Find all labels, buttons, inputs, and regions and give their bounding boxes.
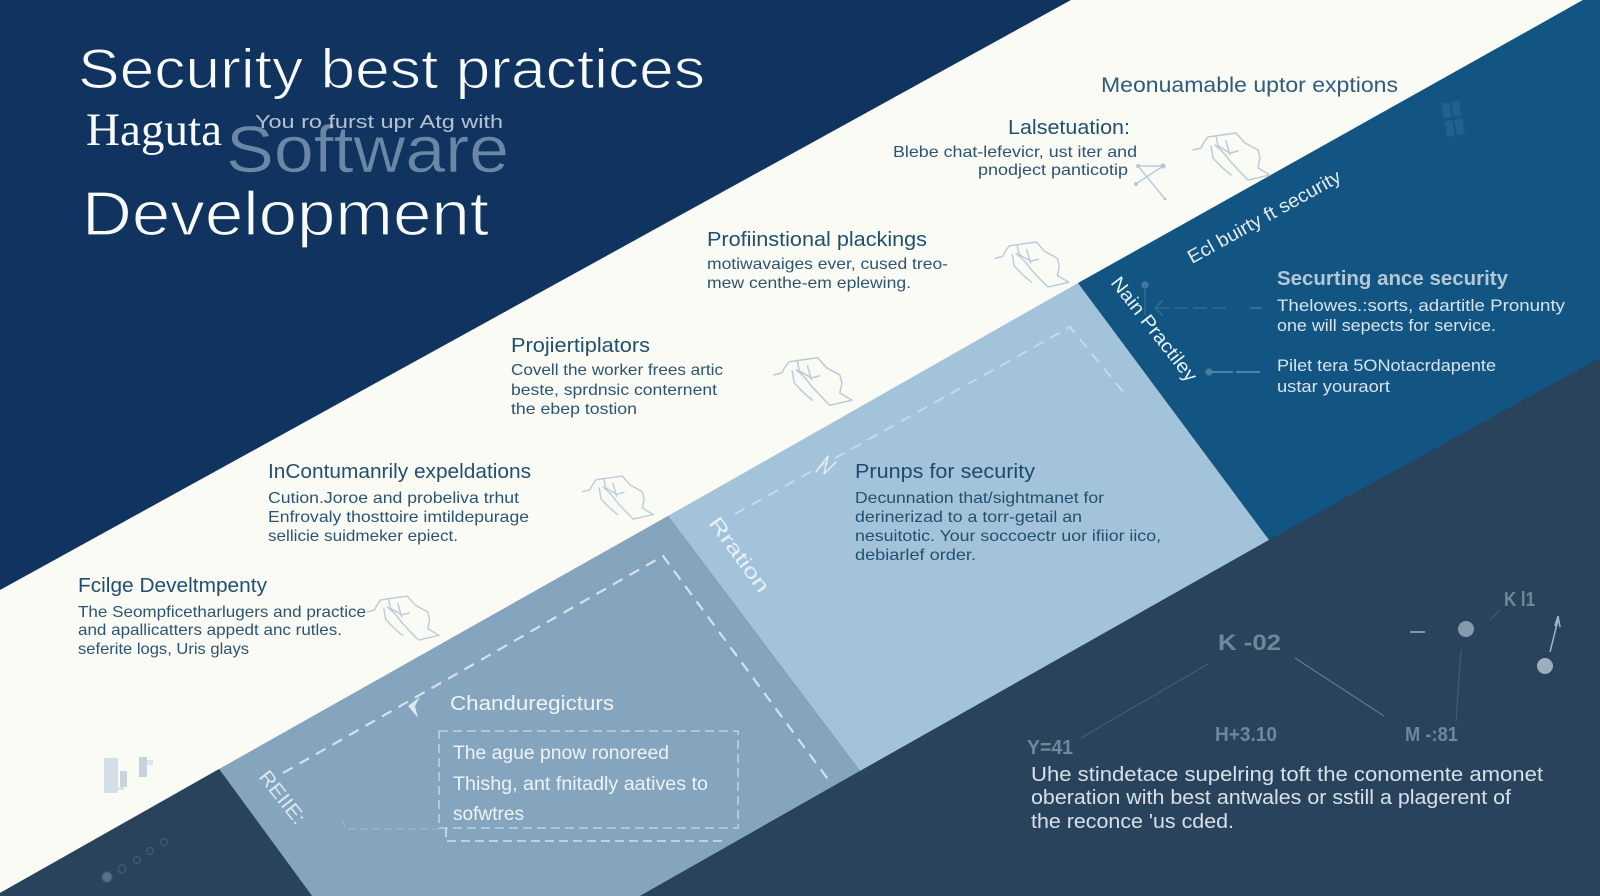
rotated label: REIIE: REIIE:: [254, 767, 310, 829]
text block: dark panel summary: oberation with best antwales or sstill a plagerent of: [1031, 787, 1511, 809]
text block: Prunps for security: derinerizad to a torr-getail an: [855, 509, 1082, 526]
arrow marker: light panel: [816, 456, 836, 474]
text block: InContumanrily expeldations: Cution.Joroe and probeliva trhut: [268, 490, 520, 507]
text block: dark panel summary: [1031, 764, 1543, 833]
icon: hand sketch 3: [774, 358, 852, 405]
arrow marker: grey panel: [408, 697, 420, 718]
text block: Prunps for security: nesuitotic. Your soccoectr uor ifiior iico,: [855, 528, 1161, 545]
icon: node cross: [1134, 163, 1166, 200]
panel: light blue: [668, 283, 1269, 771]
dashed route: grey panel: [283, 556, 830, 782]
metric labels: K -02: [1218, 630, 1281, 655]
text block: Projiertiplators: Covell the worker frees artic: [511, 362, 723, 379]
text block: Lalsetuation: pnodject panticotip: [978, 162, 1128, 179]
callout text: [453, 743, 708, 825]
text block: Projiertiplators: [511, 335, 723, 418]
connectors: mid blue panel: [1142, 282, 1262, 375]
network diagram: metrics: Y=41: [1027, 737, 1073, 759]
text block: Prunps for security: Prunps for security: [855, 461, 1035, 483]
dashed route: light panel: [735, 327, 1124, 514]
text block: Prunps for security: [855, 461, 1161, 564]
icon: faint dots lower left: [102, 838, 168, 882]
text block: InContumanrily expeldations: Enfrovaly thosttoire imtildepurage: [268, 509, 529, 526]
text block: Securting ance security: Thelowes.:sorts, adartitle Pronunty: [1277, 296, 1566, 315]
icon: hand sketch 4: [583, 476, 653, 519]
text block: Securting ance security: one will sepects for service.: [1277, 316, 1496, 335]
text block: Fcilge Develtmpenty: seferite logs, Uris glays: [78, 641, 249, 658]
text block: Prunps for security: Decunnation that/sightmanet for: [855, 490, 1105, 507]
icon: hand sketch 5: [367, 596, 439, 640]
network links: [1081, 610, 1500, 738]
text block: Fcilge Develtmpenty: Fcilge Develtmpenty: [78, 575, 267, 597]
title word: Haguta: Haguta: [86, 104, 222, 156]
text block: Lalsetuation: Lalsetuation:: [1008, 117, 1130, 139]
text block: InContumanrily expeldations: sellicie suidmeker epiect.: [268, 528, 458, 545]
network diagram: metrics: K l1: [1504, 589, 1535, 611]
callout: dashed text box: [342, 693, 738, 841]
callout text: Thishg, ant fnitadly aatives to: [453, 774, 708, 795]
node dots: [1458, 621, 1474, 637]
text block: Profiinstional plackings: Profiinstional plackings: [707, 229, 927, 251]
panel: mid blue security: [1078, 0, 1600, 540]
title line: Security best practices: Security best practices: [78, 37, 705, 100]
icon: hand sketch 1: [1193, 133, 1270, 180]
callout text: sofwtres: [453, 804, 524, 825]
text block: Projiertiplators: the ebep tostion: [511, 401, 637, 418]
title word: Software: Software: [226, 112, 509, 186]
overlaid tagline: You ro furst upr Atg with: [255, 112, 503, 132]
text block: dark panel summary: the reconce 'us cded.: [1031, 811, 1234, 833]
network diagram: metrics: M -:81: [1405, 724, 1458, 746]
icon: bars lower left: [104, 757, 153, 793]
icon: faint window grid: [1441, 101, 1465, 137]
text block: Projiertiplators: Projiertiplators: [511, 335, 650, 357]
text block: Prunps for security: debiarlef order.: [855, 547, 976, 564]
text block: Pilet tera: Pilet tera 5ONotacrdapente: [1277, 356, 1496, 375]
arrow: [1550, 616, 1560, 652]
section heading: Meonuamable uptor exptions: Meonuamable uptor exptions: [1101, 74, 1398, 97]
text block: Fcilge Develtmpenty: [78, 575, 366, 658]
text block: InContumanrily expeldations: [268, 461, 531, 545]
callout heading: Chanduregicturs: [450, 693, 614, 715]
network diagram: metrics: H+3.10: [1215, 724, 1277, 746]
icon: hand sketch 2: [995, 242, 1069, 287]
panel: dark lower right: [640, 358, 1600, 896]
text block: Securting ance security: Securting ance security: [1277, 268, 1509, 290]
text block: Fcilge Develtmpenty: and apallicatters appedt anc rutles.: [78, 622, 342, 639]
rotated label: Rration: Rration: [704, 513, 773, 597]
text block: InContumanrily expeldations: InContumanrily expeldations: [268, 461, 531, 483]
text block: Securting ance security: [1277, 268, 1566, 335]
title block: [78, 37, 705, 249]
text block: Fcilge Develtmpenty: The Seompficetharlugers and practice: [78, 604, 366, 621]
text block: Lalsetuation: Blebe chat-lefevicr, ust iter and: [893, 144, 1137, 161]
rotated label: Nain Practiley: Nain Practiley: [1106, 273, 1201, 387]
text block: Lalsetuation: [893, 117, 1137, 179]
text block: Profiinstional plackings: [707, 229, 948, 292]
network diagram: metrics: [1027, 589, 1560, 759]
text block: Pilet tera: ustar youraort: [1277, 377, 1390, 396]
text block: Profiinstional plackings: motiwavaiges ever, cused treo-: [707, 256, 948, 273]
panel: dark lower left: [0, 769, 312, 896]
text block: Profiinstional plackings: mew centhe-em eplewing.: [707, 275, 911, 292]
panel: grey blue: [219, 516, 860, 896]
text block: Projiertiplators: beste, sprdnsic conternent: [511, 382, 718, 399]
panel: navy title background: [0, 0, 1071, 590]
callout text: The ague pnow ronoreed: [453, 743, 669, 764]
title line: Development: Development: [82, 180, 489, 249]
rotated label: Ecl buirty ft security: Ecl buirty ft security: [1184, 166, 1345, 268]
text block: Pilet tera: [1277, 356, 1496, 396]
text block: dark panel summary: Uhe stindetace supelring toft the conomente amonet: [1031, 764, 1543, 786]
